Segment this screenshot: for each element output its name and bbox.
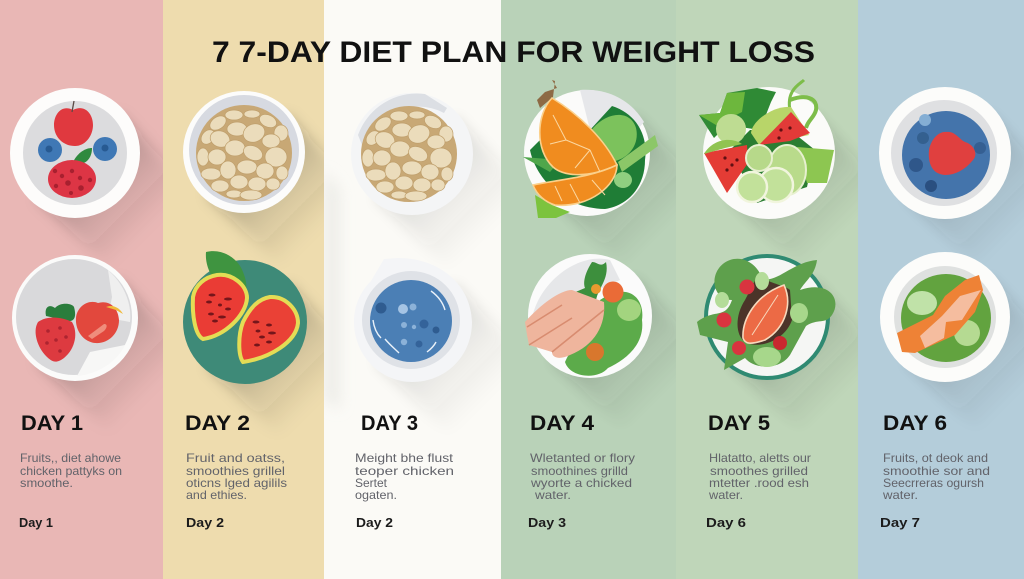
panel: day 4 — [501, 0, 676, 579]
panel: day 2 — [163, 0, 324, 579]
heading: day 6: DAY 6 — [883, 412, 947, 435]
heading: day 1: DAY 1 — [21, 412, 83, 435]
icon: berry bowl — [879, 87, 1011, 219]
icon: water bowl — [362, 271, 472, 382]
heading: day 5: DAY 5 — [708, 412, 770, 435]
description: day 4: smoothines grilld — [531, 464, 628, 478]
description: day 1: smoothe. — [20, 476, 73, 490]
description: day 1: chicken pattyks on — [20, 464, 122, 478]
heading: day 2: DAY 2 — [185, 412, 250, 435]
description: day 3: Sertet — [355, 476, 388, 490]
description: day 5: Hlatatto, aletts our — [709, 451, 811, 465]
label: day 6: Day 7 — [880, 515, 920, 530]
description: day 6: Fruits, ot deok and — [883, 451, 988, 465]
icon: oats bowl — [351, 93, 473, 215]
description: day 2: oticns lged agilils — [186, 476, 287, 490]
icon: melon plate — [183, 251, 307, 384]
icon: orange salad — [523, 80, 658, 218]
description: day 4 — [530, 454, 635, 499]
description: day 3: ogaten. — [355, 488, 397, 502]
label: day 3: Day 2 — [356, 515, 393, 530]
description: day 5 — [709, 454, 811, 499]
description: day 1: Fruits,, diet ahowe — [20, 451, 121, 465]
description: day 5: smoothes grilled — [710, 464, 808, 478]
title: 7 7-DAY DIET PLAN FOR WEIGHT LOSS — [212, 36, 815, 69]
label: day 2: Day 2 — [186, 515, 224, 530]
description: day 4: Wletanted or flory — [530, 451, 635, 465]
heading: day 4: DAY 4 — [530, 412, 594, 435]
icon: oats bowl — [183, 91, 305, 213]
description: day 4: water. — [534, 488, 571, 502]
description: day 4: wyorte a chicked — [530, 476, 632, 490]
panel: day 6 — [858, 0, 1024, 579]
description: day 6 — [883, 454, 990, 499]
icon: salmon and cucumber bowl — [880, 252, 1010, 382]
panel: day 5 — [676, 0, 858, 579]
description: day 2 — [186, 454, 287, 499]
description: day 3 — [355, 451, 454, 502]
description: day 2: smoothies grillel — [186, 464, 285, 478]
description: day 5: mtetter .rood esh — [709, 476, 809, 490]
icon: berries bowl — [12, 255, 138, 381]
icon: salmon salad — [697, 256, 835, 378]
description: day 6: water. — [882, 488, 918, 502]
panel: day 1 — [0, 0, 163, 579]
description: day 1 — [20, 454, 122, 487]
description: day 6: Seecrreras ogursh — [883, 476, 984, 490]
label: day 4: Day 3 — [528, 515, 566, 530]
description: day 3: teoper chicken — [355, 464, 454, 478]
icon: fruit plate — [10, 88, 140, 218]
label: day 1: Day 1 — [19, 515, 53, 530]
description: day 3: Meight bhe flust — [355, 451, 454, 465]
description: day 2: and ethies. — [186, 488, 247, 502]
label: day 5: Day 6 — [706, 515, 746, 530]
description: day 6: smoothie sor and — [883, 464, 990, 478]
panel: day 3 — [324, 0, 501, 579]
icon: chicken salad — [525, 254, 652, 378]
description: day 2: Fruit and oatss, — [186, 451, 285, 465]
heading: day 3: DAY 3 — [361, 412, 418, 435]
icon: melon and cucumber salad — [699, 80, 835, 219]
description: day 5: water. — [708, 488, 743, 502]
